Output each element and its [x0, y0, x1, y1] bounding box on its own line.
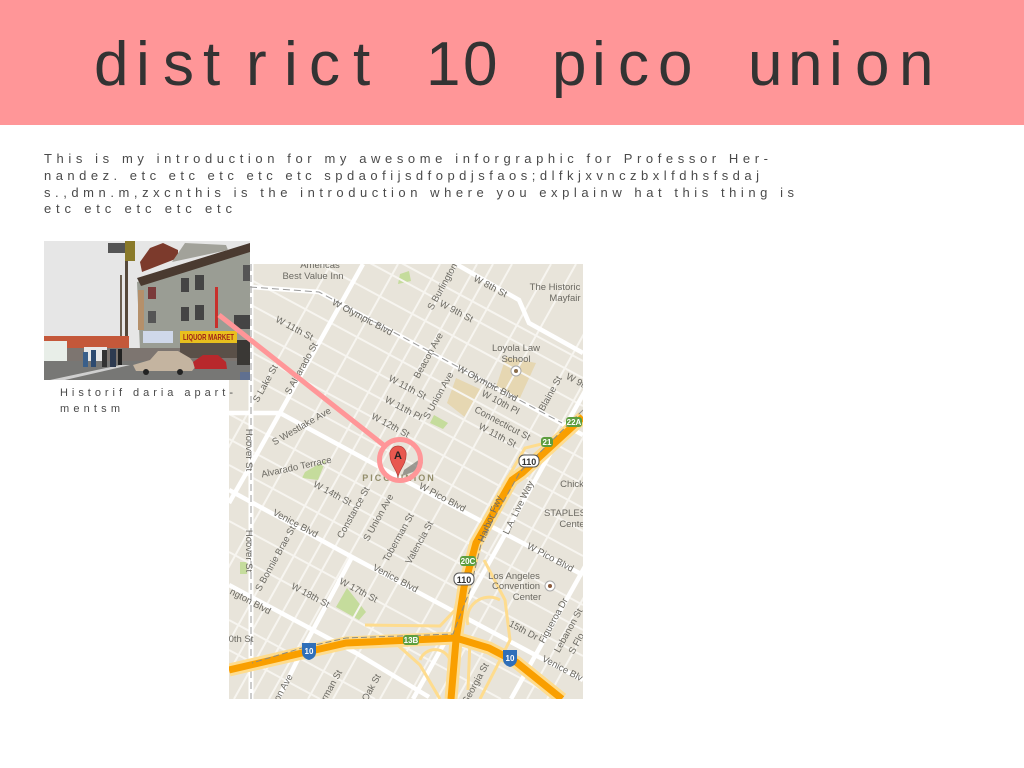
street labels: Cente: [559, 519, 585, 530]
street labels: W 14th St: [311, 479, 353, 509]
street labels: 0th St: [229, 634, 254, 645]
introduction text: etc etc etc etc etc: [44, 201, 232, 216]
street labels: Mayfair: [549, 293, 581, 304]
street labels: W 11th St: [386, 373, 428, 402]
street labels: Best Value Inn: [282, 271, 344, 282]
introduction text: s.,dmn.m,zxcnthis is the introduction where you explainw hat this thing is: [44, 185, 795, 200]
street labels: Hoover St: [243, 429, 254, 471]
highway shields: 10: [305, 647, 314, 656]
building: [137, 243, 250, 350]
street labels: S Union Ave: [421, 370, 456, 421]
highway shields: 110: [457, 575, 471, 585]
street labels: Constance St: [335, 485, 373, 540]
street labels: STAPLES: [544, 508, 586, 519]
street labels: L.A. Live Way: [501, 479, 537, 536]
introduction text: This is my introduction for my awesome inforgraphic for Professor Her-: [44, 151, 768, 166]
street labels: W 18th St: [289, 581, 331, 611]
photo: historic apartments: [44, 241, 250, 380]
street labels: Hoover St: [243, 530, 254, 572]
highway shields: 22A: [567, 418, 582, 427]
introduction text: nandez. etc etc etc etc etc spdaofijsdfopdjsfaos;dlfkjxvnczbxlfdhsfsdaj: [44, 168, 759, 183]
street labels: Alvarado Terrace: [260, 455, 333, 480]
minor streets: [229, 264, 583, 699]
street labels: S Burlington: [425, 261, 460, 312]
parks and campus blocks: [240, 271, 536, 620]
highway shields: 21: [543, 438, 552, 447]
street labels: Lebanon St: [552, 607, 586, 655]
street labels: W 12th St: [369, 411, 411, 441]
street labels: W 11th St: [476, 421, 518, 450]
street labels: W 11th Pl: [383, 394, 424, 423]
street labels: Center: [513, 592, 541, 603]
street labels: Toberman St: [381, 511, 417, 564]
major streets: [229, 264, 583, 699]
street labels: S Bonnie Brae St: [253, 524, 298, 593]
street labels: W Olympic Blvd: [330, 297, 394, 338]
street labels: W 10th Pl: [479, 388, 521, 417]
street labels: S Flo: [567, 631, 587, 656]
photo caption: Historif daria apart-: [60, 387, 233, 399]
cars and pedestrians: [83, 349, 250, 380]
photo caption: [60, 387, 233, 415]
street labels: Venice Blv: [540, 654, 585, 684]
background shop and street: [44, 331, 250, 380]
freeway ramps: [365, 442, 550, 699]
street labels: W Pico Blvd: [525, 541, 575, 575]
street labels: W 11th St: [273, 314, 315, 343]
street labels: The Historic: [530, 282, 581, 293]
map of Pico Union: [229, 264, 583, 699]
street labels: Connecticut St: [472, 404, 532, 443]
street labels: Beacon Ave: [412, 331, 446, 381]
street labels: S Alvarado St: [283, 341, 321, 397]
street labels: Loyola Law: [492, 343, 540, 354]
street labels: [228, 260, 587, 707]
street labels: W Olympic Blvd: [455, 363, 519, 404]
street labels: Blaine St: [537, 374, 565, 413]
highway shields: 20C: [461, 557, 476, 566]
introduction text: [44, 151, 795, 216]
street labels: Oak St: [360, 672, 384, 703]
street labels: S Westlake Ave: [270, 406, 333, 448]
location pin with ring: [380, 440, 423, 480]
street labels: W 9t: [564, 371, 587, 390]
highway shields: 110: [522, 457, 536, 467]
street labels: W 8th St: [472, 273, 509, 300]
street labels: School: [501, 354, 531, 365]
landmark markers: [511, 366, 555, 591]
location pin with ring: A: [394, 450, 402, 462]
title banner: [0, 0, 1024, 125]
highway shields: 10: [506, 654, 515, 663]
street labels: Los Angeles: [488, 571, 540, 582]
street labels: on Ave: [272, 672, 296, 703]
utility poles: [108, 241, 135, 336]
connector arrow from photo to map pin: [219, 315, 386, 447]
street labels: Americas: [300, 260, 340, 271]
highway shields: [302, 417, 582, 667]
street labels: Chick: [560, 479, 584, 490]
freeways: [229, 417, 583, 699]
street labels: Valencia St: [404, 519, 436, 566]
street labels: W 17th St: [337, 576, 379, 606]
street labels: PICO UNION: [362, 473, 436, 483]
street labels: Figueroa Dr: [537, 596, 571, 645]
street labels: S Lake St: [251, 363, 281, 404]
street labels: W Pico Blvd: [417, 481, 467, 515]
highway shields: 13B: [404, 636, 419, 645]
street labels: S Union Ave: [361, 492, 396, 543]
street labels: Convention: [492, 581, 540, 592]
street labels: Georgia St: [460, 661, 492, 706]
street labels: Harbor Fwy: [476, 494, 505, 544]
background shop and street: LIQUOR MARKET: [183, 333, 234, 342]
street labels: W 9th St: [438, 298, 475, 325]
street labels: Venice Blvd: [371, 562, 420, 595]
street labels: 15th Dr: [507, 619, 540, 643]
title: district10picounion: [94, 30, 933, 99]
street labels: ngton Blvd: [228, 586, 273, 617]
street labels: Venice Blvd: [271, 507, 320, 540]
photo caption: mentsm: [60, 403, 120, 415]
street labels: erman St: [317, 668, 345, 707]
